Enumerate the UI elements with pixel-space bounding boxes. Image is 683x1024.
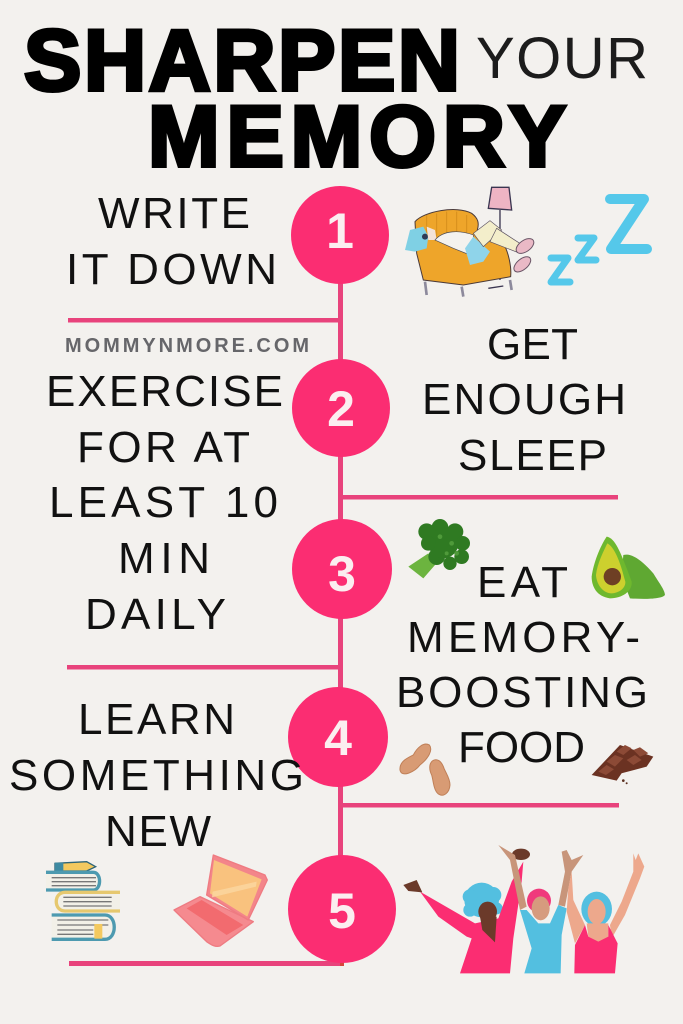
icon: person sleeping in armchair <box>405 187 536 297</box>
step 4 badge <box>288 687 388 787</box>
step 1 badge <box>291 186 389 284</box>
timeline spine and connectors <box>67 280 619 966</box>
text: exercise: MIN <box>118 534 210 583</box>
watermark: mommynmore.com: MOMMYNMORE.COM <box>65 335 309 357</box>
text: exercise: FOR AT <box>77 423 250 472</box>
text: exercise: EXERCISE <box>46 367 283 416</box>
text: get enough sleep: GET <box>487 320 578 369</box>
text: eat memory-boosting food <box>396 558 648 772</box>
woman with blue shirt <box>498 845 583 973</box>
icon: peanuts <box>400 744 450 795</box>
step 5 badge <box>288 855 396 963</box>
woman with pink top <box>567 853 644 973</box>
illustration: three women cheering <box>403 845 644 973</box>
title <box>24 13 648 185</box>
icon: zzz <box>551 199 647 282</box>
step 1 badge: 1 <box>326 203 354 259</box>
icon: chocolate bar <box>592 745 653 784</box>
text: get enough sleep: SLEEP <box>458 431 607 480</box>
text: learn something new: LEARN <box>78 695 235 744</box>
text: get enough sleep <box>422 320 626 480</box>
step 2 badge <box>292 359 390 457</box>
step 3 badge: 3 <box>328 546 356 602</box>
text: learn something new: NEW <box>105 807 211 856</box>
step 3 badge <box>292 519 392 619</box>
woman with blue afro <box>403 849 530 973</box>
text: eat memory-boosting food: MEMORY- <box>407 613 640 662</box>
text: eat memory-boosting food: FOOD <box>458 723 585 772</box>
text: learn something new <box>9 695 304 856</box>
text: write it down: WRITE <box>98 189 250 238</box>
text: exercise: LEAST 10 <box>49 478 278 527</box>
icon: stack of books <box>46 862 120 939</box>
icon: laptop <box>174 855 267 946</box>
step 4 badge: 4 <box>324 710 352 766</box>
step 5 badge: 5 <box>328 883 356 939</box>
text: learn something new: SOMETHING <box>9 751 304 800</box>
text: write it down: IT DOWN <box>66 245 277 294</box>
title: YOUR <box>476 26 648 91</box>
text: eat memory-boosting food: EAT <box>477 558 568 607</box>
text: exercise <box>46 367 283 639</box>
icon: avocado <box>592 537 665 599</box>
step 2 badge: 2 <box>327 381 355 437</box>
icon: broccoli <box>408 519 470 578</box>
text: get enough sleep: ENOUGH <box>422 375 626 424</box>
text: exercise: DAILY <box>85 590 226 639</box>
text: eat memory-boosting food: BOOSTING <box>396 668 648 717</box>
text: write it down <box>66 189 277 294</box>
title: MEMORY <box>148 89 566 185</box>
title: SHARPEN <box>24 13 460 109</box>
